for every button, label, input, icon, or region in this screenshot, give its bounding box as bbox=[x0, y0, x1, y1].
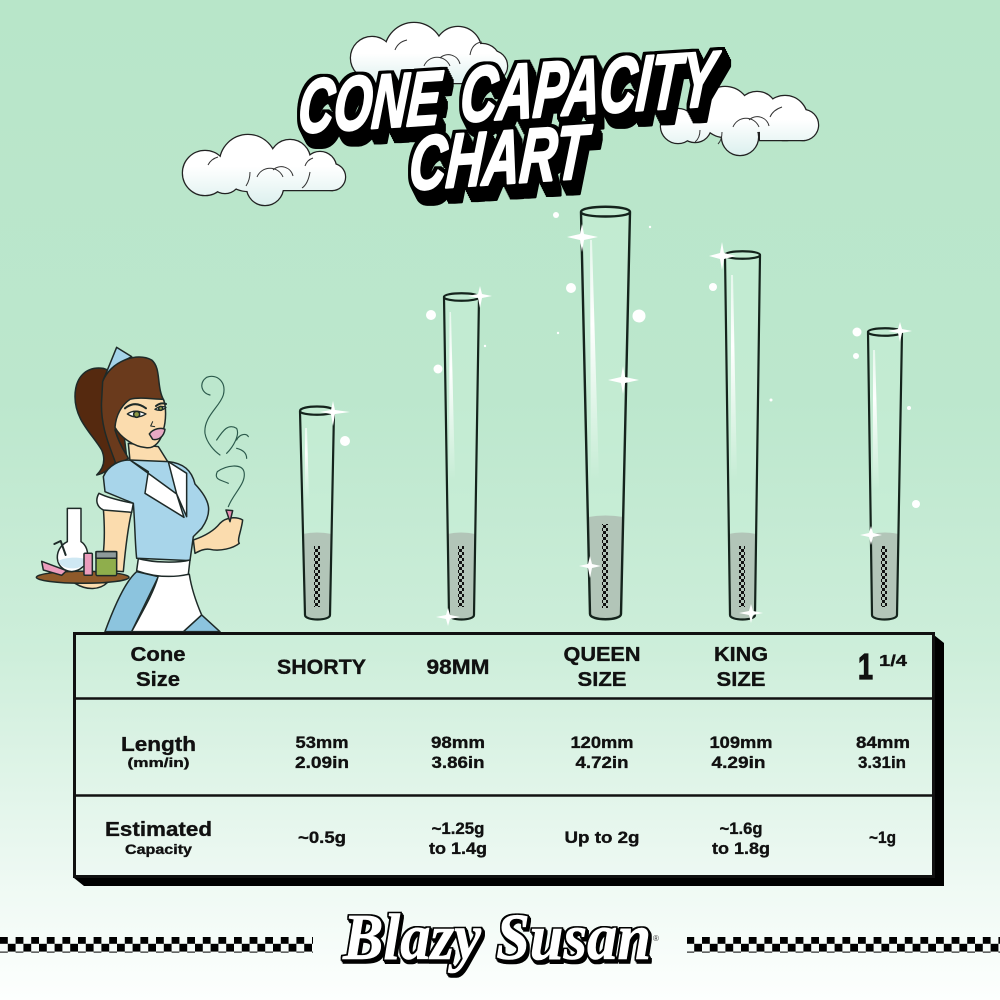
row: estimated capacity: ~1.6g bbox=[720, 819, 762, 838]
row: cone size: SIZE bbox=[578, 669, 626, 691]
cloud: left bbox=[183, 135, 345, 205]
logo: Blazy Susan: Blazy Susan bbox=[342, 901, 651, 974]
hand below tray bbox=[75, 583, 107, 588]
sparkles and dots bbox=[320, 212, 920, 626]
cone: king size bbox=[725, 251, 760, 620]
row: length: 4.72in bbox=[576, 753, 628, 772]
row: estimated capacity: to 1.8g bbox=[712, 839, 770, 858]
belt bbox=[137, 559, 190, 576]
row: estimated capacity: ~1g bbox=[869, 828, 896, 847]
row: estimated capacity: ~0.5g bbox=[298, 828, 346, 847]
row: estimated capacity: ~1.25g bbox=[432, 819, 484, 838]
cone: 1 1/4 bbox=[868, 328, 902, 620]
title: CONE bbox=[296, 56, 445, 150]
row dividers bbox=[75, 698, 933, 796]
row: length: 2.09in bbox=[295, 753, 349, 772]
row: length: 84mm bbox=[856, 733, 910, 752]
row: cone size: KING bbox=[714, 644, 768, 666]
apron bbox=[132, 574, 202, 632]
tray bbox=[36, 571, 129, 583]
cone: queen size bbox=[581, 207, 630, 619]
row: cone size bbox=[130, 644, 907, 691]
lips bbox=[149, 428, 165, 440]
table bbox=[74, 634, 944, 886]
row: length bbox=[121, 733, 910, 772]
row: length: Length bbox=[121, 734, 196, 756]
jar bbox=[96, 552, 117, 576]
face bbox=[115, 398, 166, 448]
row: estimated capacity: Up to 2g bbox=[564, 828, 640, 847]
row: length: 3.31in bbox=[858, 753, 906, 772]
row: cone size: SHORTY bbox=[277, 656, 366, 679]
logo: Blazy Susan: ® bbox=[653, 934, 659, 943]
ponytail bbox=[75, 368, 127, 475]
bow bbox=[103, 347, 132, 381]
sleeve cuff bbox=[97, 493, 133, 512]
collar bbox=[130, 460, 187, 517]
table frame bbox=[74, 634, 934, 876]
title: CHART bbox=[407, 109, 595, 207]
row: cone size: 1/4 bbox=[879, 653, 907, 670]
row: length: (mm/in) bbox=[128, 755, 190, 770]
row: length: 109mm bbox=[710, 733, 772, 752]
smoke bbox=[202, 376, 248, 507]
brows bbox=[125, 403, 166, 408]
cloud: right bbox=[661, 87, 818, 155]
row: cone size: 98MM bbox=[426, 656, 490, 679]
title bbox=[296, 34, 723, 207]
row: estimated capacity: to 1.4g bbox=[429, 839, 487, 858]
lighter bbox=[84, 553, 92, 575]
dress bodice bbox=[103, 460, 209, 561]
row: cone size: QUEEN bbox=[564, 644, 640, 666]
row: estimated capacity: Estimated bbox=[105, 819, 212, 841]
row: estimated capacity bbox=[105, 819, 896, 858]
row: cone size: Cone bbox=[130, 644, 186, 666]
table shadow bbox=[74, 635, 944, 886]
bong bbox=[57, 508, 88, 572]
cone: 98mm bbox=[444, 293, 479, 620]
row: cone size: 1 bbox=[858, 646, 873, 687]
row: length: 120mm bbox=[570, 733, 634, 752]
checker strip: left bbox=[0, 937, 313, 953]
cone: shorty bbox=[300, 406, 334, 620]
checker strip: right bbox=[687, 937, 1000, 953]
cloud: top bbox=[351, 23, 507, 83]
left arm bbox=[100, 508, 132, 572]
row: length: 98mm bbox=[431, 733, 485, 752]
pink cone in hand bbox=[226, 510, 233, 522]
nose bbox=[151, 422, 155, 427]
row: length: 3.86in bbox=[432, 753, 484, 772]
right arm bbox=[193, 518, 243, 553]
row: cone size: SIZE bbox=[716, 669, 766, 691]
row: length: 53mm bbox=[296, 733, 348, 752]
waitress illustration bbox=[36, 347, 248, 632]
hair bbox=[101, 357, 164, 466]
row: length: 4.29in bbox=[712, 753, 766, 772]
skirt bbox=[105, 572, 220, 632]
neck bbox=[128, 443, 177, 494]
rolling papers bbox=[42, 561, 67, 575]
row: estimated capacity: Capacity bbox=[125, 841, 192, 857]
row: cone size: Size bbox=[136, 669, 180, 691]
eyes bbox=[127, 407, 166, 417]
title: CAPACITY bbox=[458, 34, 723, 139]
